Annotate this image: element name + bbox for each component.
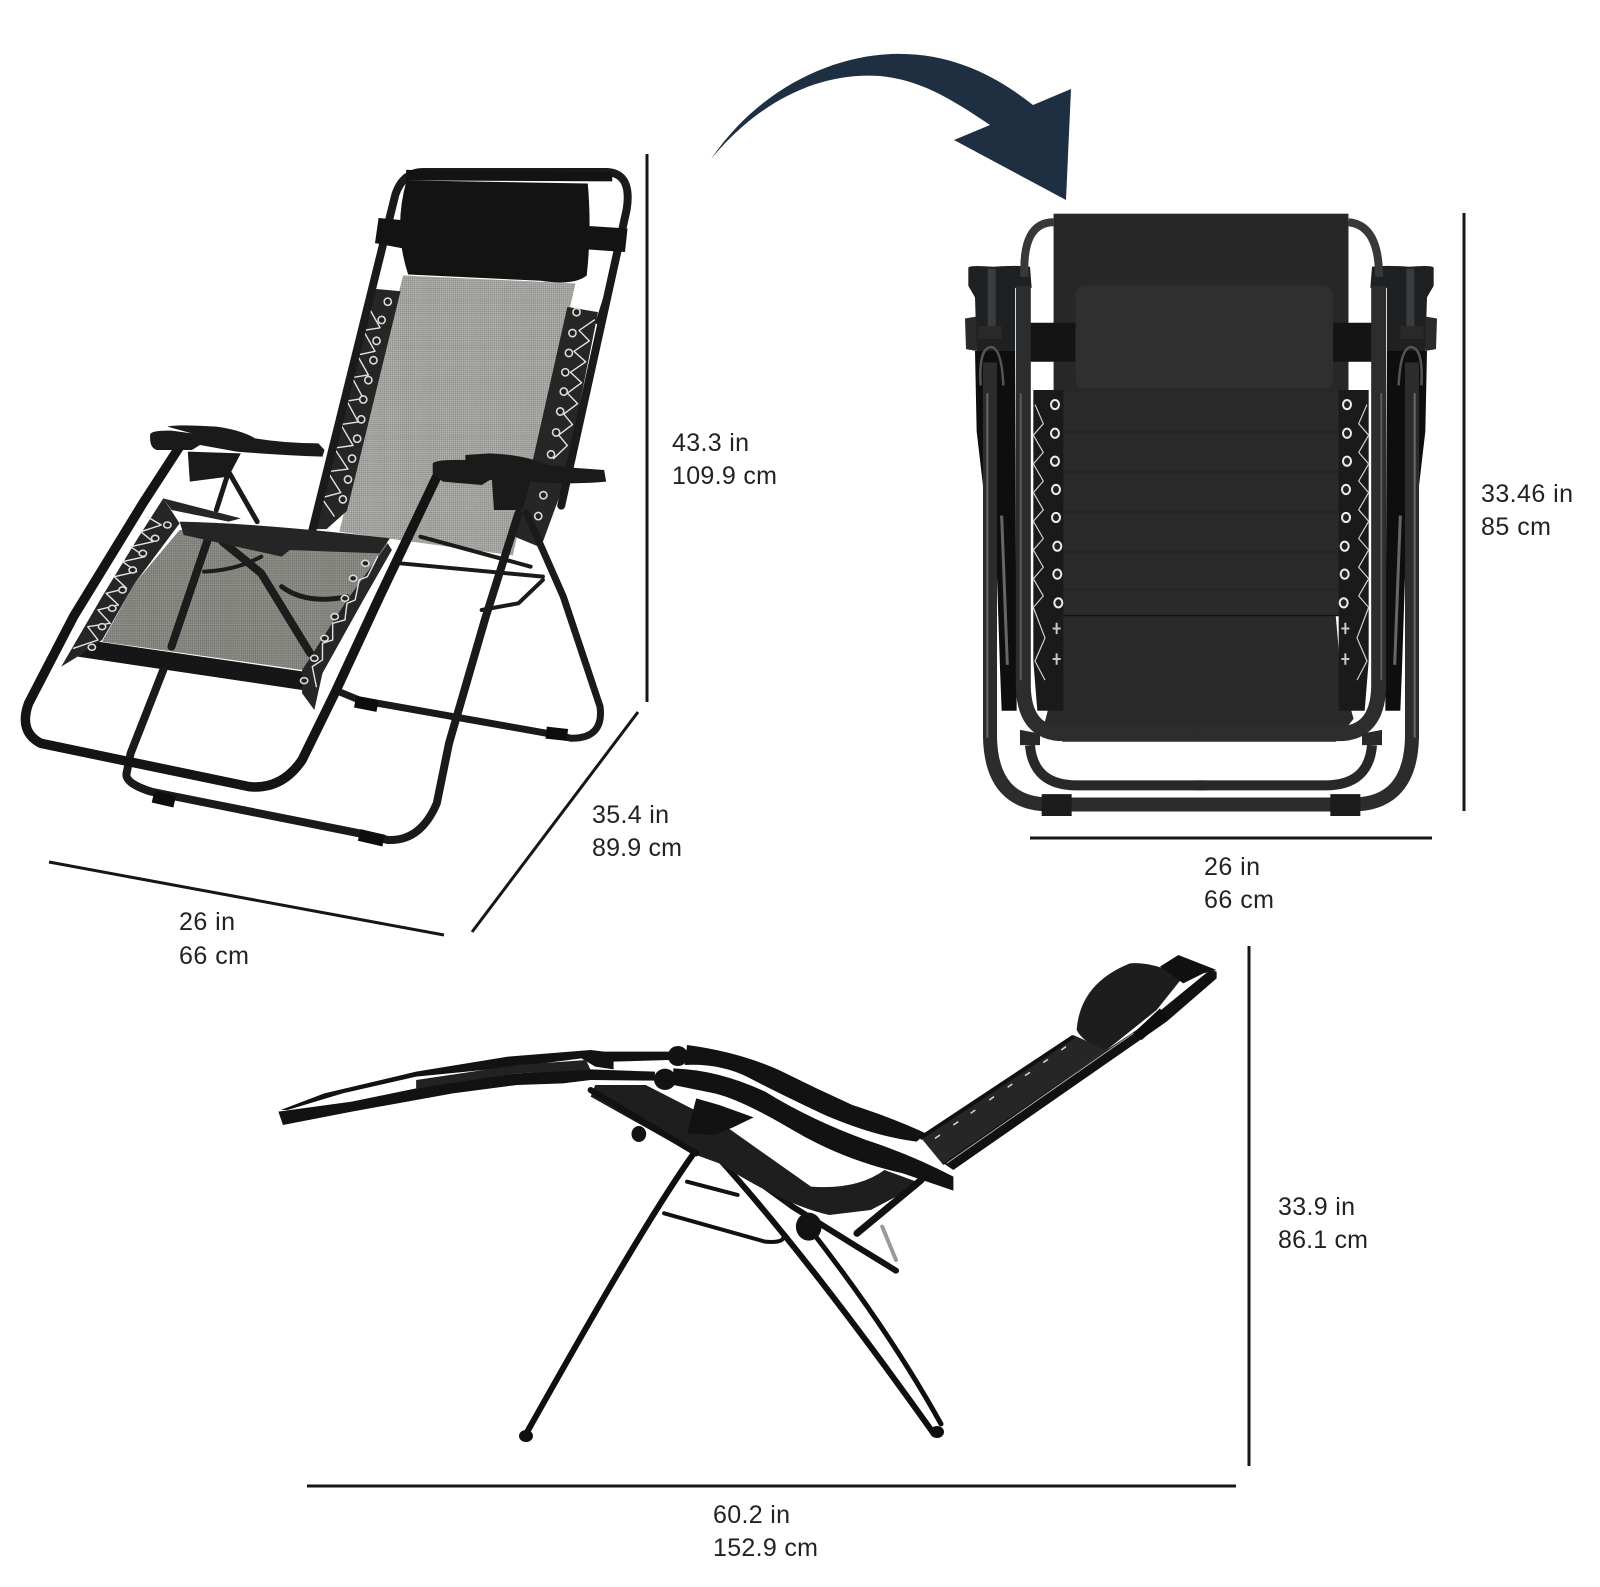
lower arm — [673, 1068, 953, 1191]
label: width upright — [179, 908, 249, 970]
frame up — [857, 1180, 921, 1233]
label: height folded: 33.46 in — [1481, 480, 1573, 508]
centre panels — [1024, 214, 1379, 742]
silver handle — [882, 1227, 896, 1260]
label: height reclined — [1278, 1193, 1368, 1254]
eyelets — [935, 1047, 1066, 1138]
label: height folded — [1481, 480, 1573, 541]
foot tip right — [930, 1426, 944, 1438]
back upper edge — [920, 1037, 1073, 1138]
headrest straps — [375, 170, 628, 252]
label: width upright: 66 cm — [179, 942, 249, 970]
label: height folded: 85 cm — [1481, 513, 1551, 541]
seat top band — [180, 522, 390, 557]
stitching — [947, 1033, 1133, 1163]
footrest lower tube — [278, 1069, 655, 1125]
label: height reclined: 86.1 cm — [1278, 1226, 1368, 1254]
label: width folded: 66 cm — [1204, 886, 1274, 914]
label: height reclined: 33.9 in — [1278, 1193, 1355, 1221]
front legs — [126, 513, 518, 840]
rubber grip — [1042, 794, 1072, 816]
rubber grips — [153, 702, 567, 841]
label: length reclined: 60.2 in — [713, 1501, 790, 1529]
strap — [1024, 323, 1377, 362]
seat grommets — [88, 522, 369, 684]
left armrest — [150, 425, 325, 482]
rear leg — [714, 1153, 934, 1434]
label: length reclined — [713, 1501, 818, 1562]
rear legs — [216, 472, 257, 522]
back grommets — [339, 298, 580, 520]
rear leg second tube — [806, 1224, 941, 1424]
chair: reclined side view — [278, 955, 1217, 1442]
label: width folded — [1204, 853, 1274, 914]
pivot — [796, 1213, 822, 1241]
wing bolts — [1053, 623, 1061, 665]
upper arm — [685, 1045, 926, 1142]
chair: upright view — [25, 170, 628, 841]
loop — [980, 347, 1003, 385]
top bow tube — [1024, 222, 1379, 277]
lattice highlights — [321, 307, 594, 516]
right armrest — [433, 453, 606, 510]
back frame — [312, 172, 628, 531]
cords and tubes: right — [1195, 286, 1382, 816]
label: length reclined: 152.9 cm — [713, 1534, 818, 1562]
label: depth upright: 89.9 cm — [592, 834, 682, 862]
foot tip left — [519, 1430, 533, 1442]
label: height upright: 109.9 cm — [672, 462, 777, 490]
label: width upright: 26 in — [179, 908, 235, 936]
footrest fabric — [416, 1060, 591, 1088]
fabric stripes — [1050, 432, 1350, 590]
side strap — [1133, 1008, 1167, 1040]
under-seat shadows — [171, 538, 310, 653]
arm block — [968, 266, 1032, 351]
back fabric — [920, 1035, 1107, 1165]
seat frame tube — [1023, 286, 1207, 734]
grommets — [1051, 400, 1062, 607]
seat lattices — [61, 498, 392, 710]
lower bow — [1030, 745, 1207, 785]
side assembly: right — [1195, 266, 1437, 804]
curved arrow — [711, 54, 1071, 200]
seat frame tube — [25, 447, 437, 787]
cords and tubes: left — [1020, 286, 1207, 816]
clamp — [687, 1098, 754, 1135]
frame tube — [591, 1090, 696, 1153]
side assembly: left — [965, 266, 1207, 804]
side plate — [975, 351, 1017, 711]
label: depth upright: 35.4 in — [592, 801, 669, 829]
knob — [965, 317, 1002, 351]
back mesh — [339, 276, 576, 555]
seat panel — [1045, 392, 1354, 742]
chair: folded view — [965, 214, 1437, 816]
dimension lines — [49, 154, 1464, 1486]
label: height upright — [672, 429, 777, 490]
bracket — [631, 1126, 646, 1142]
seat fabric — [591, 1085, 921, 1215]
outer tube — [990, 362, 1207, 804]
label: height upright: 43.3 in — [672, 429, 749, 457]
tube collar — [1020, 730, 1040, 745]
back panel — [1054, 214, 1348, 394]
back frame — [943, 970, 1217, 1170]
lattice — [1033, 390, 1063, 711]
seat and legs section — [25, 425, 606, 841]
lattice highlights — [73, 517, 378, 687]
footrest upper tube — [281, 1050, 669, 1110]
label: depth upright — [592, 801, 682, 862]
lattice highlights — [1033, 405, 1045, 680]
headrest — [400, 180, 590, 282]
label: width folded: 26 in — [1204, 853, 1260, 881]
back section — [920, 955, 1217, 1170]
mid section — [278, 1045, 953, 1271]
headrest — [1076, 285, 1333, 389]
front leg — [526, 1153, 694, 1434]
seat bottom band — [78, 642, 304, 690]
under bars — [664, 1182, 783, 1242]
top strap — [1160, 955, 1217, 983]
legs — [519, 1153, 944, 1442]
seat mesh — [102, 530, 388, 670]
back section — [312, 170, 628, 555]
back side lattices — [312, 289, 598, 547]
knobs — [668, 1046, 688, 1066]
headrest — [1077, 963, 1183, 1050]
rear rods and handle — [400, 537, 543, 610]
